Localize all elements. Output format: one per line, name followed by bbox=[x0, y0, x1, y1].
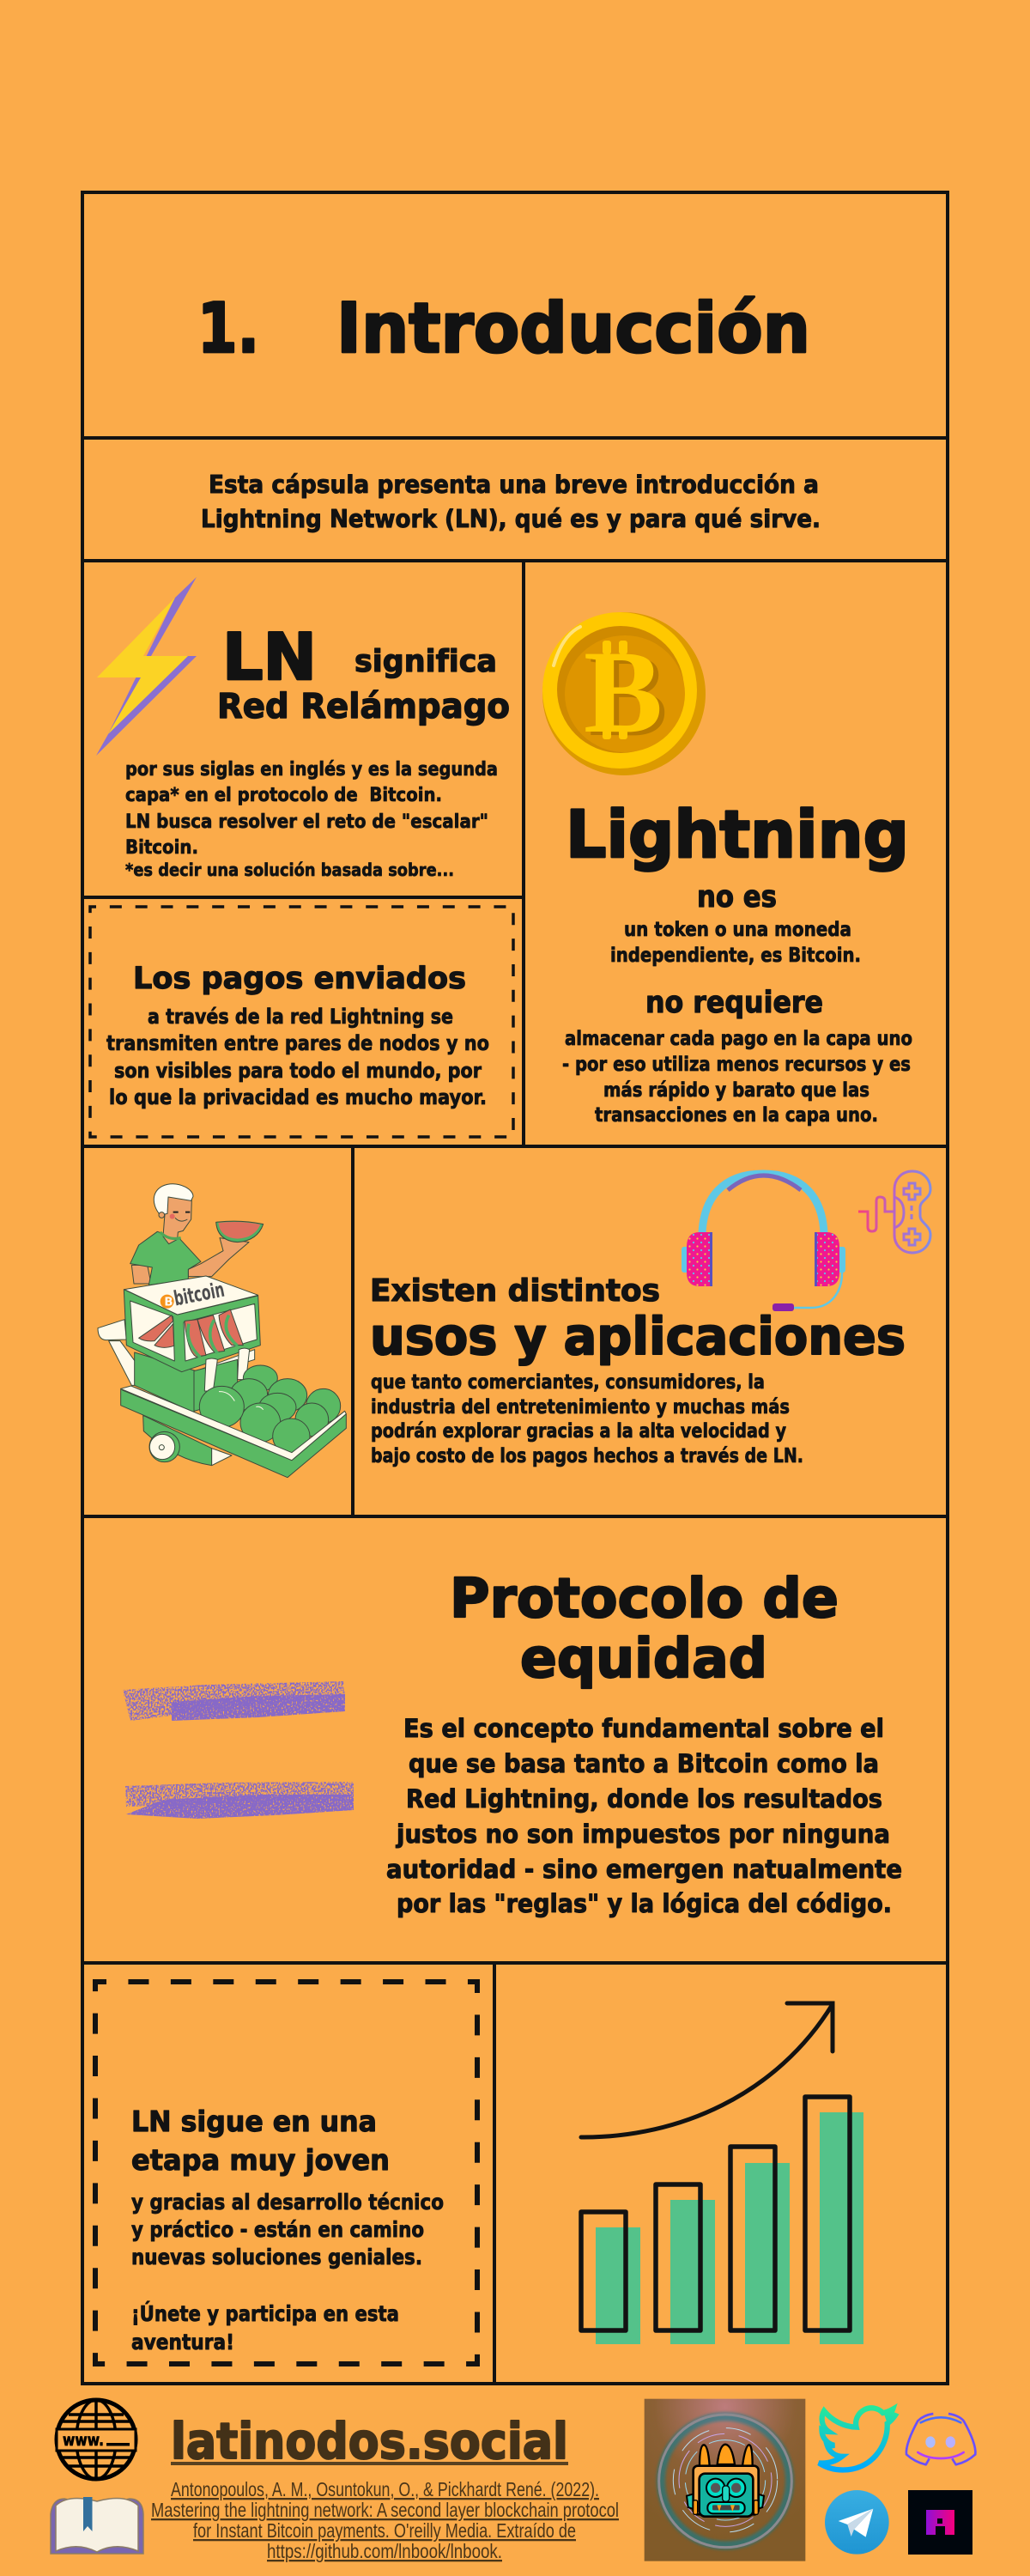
body text: LN busca resolver el reto de "escalar" bbox=[125, 811, 488, 833]
text: no requiere bbox=[562, 1026, 912, 1127]
citation: https://github.com/lnbook/lnbook. bbox=[267, 2540, 502, 2562]
icon: globe www bbox=[57, 2400, 136, 2479]
heading: LN sigue: etapa muy joven bbox=[131, 2143, 390, 2177]
text: no es bbox=[610, 917, 861, 967]
icon: discord bbox=[906, 2414, 975, 2464]
body text: industria del entretenimiento y muchas más bbox=[371, 1396, 790, 1419]
intro line 1: Esta cápsula presenta una breve introducción a bbox=[209, 471, 819, 499]
panel: Los pagos enviados bbox=[82, 897, 524, 1146]
text: no es: un token o una moneda bbox=[624, 917, 851, 941]
body text: *es decir una solución basada sobre... bbox=[125, 860, 454, 880]
text: no es: independiente, es Bitcoin. bbox=[610, 943, 861, 967]
logo: latinodos mask bbox=[645, 2399, 805, 2561]
body text: que se basa tanto a Bitcoin como la bbox=[409, 1749, 879, 1778]
arrow: growth curve bbox=[581, 2003, 833, 2137]
panel: watermelon cart illustration bbox=[82, 1146, 353, 1516]
heading: usos y aplicaciones: usos y aplicaciones bbox=[370, 1307, 906, 1367]
body text: ¡Únete y participa en esta bbox=[131, 2300, 399, 2326]
icon: lightning bolt bbox=[96, 577, 197, 756]
heading: Lightning: Lightning bbox=[566, 796, 909, 872]
body text: Bitcoin. bbox=[125, 836, 198, 859]
brush stroke 1 bbox=[123, 1681, 345, 1721]
heading: LN sigue: LN sigue en una bbox=[131, 2105, 377, 2138]
bar chart bbox=[581, 2097, 863, 2344]
body text: por las "reglas" y la lógica del código. bbox=[397, 1889, 892, 1918]
panel: LN significa bbox=[82, 561, 524, 897]
body text: capa* en el protocolo de Bitcoin. bbox=[125, 784, 442, 806]
heading: number: 1. bbox=[197, 289, 259, 368]
body text: son visibles para todo el mundo, por bbox=[114, 1059, 482, 1083]
body text bbox=[386, 1714, 902, 1918]
icon: app square bbox=[908, 2490, 972, 2555]
panel: LN sigue bbox=[82, 1963, 494, 2384]
body text: a través de la red Lightning se bbox=[148, 1005, 453, 1029]
icon: bitcoin coin bbox=[542, 612, 706, 775]
dashed frame bbox=[90, 907, 513, 1137]
body text bbox=[371, 1371, 803, 1467]
citation: for Instant Bitcoin payments. O'reilly Media. Extraído de bbox=[193, 2519, 576, 2542]
panel: usos y aplicaciones bbox=[353, 1146, 948, 1516]
citation: Mastering the lightning network: A second layer blockchain protocol bbox=[151, 2499, 619, 2521]
text: no requiere: - por eso utiliza menos recursos y es bbox=[562, 1052, 911, 1076]
illustration: vendor with bitcoin cart bbox=[98, 1184, 346, 1478]
icon: telegram bbox=[825, 2490, 889, 2555]
panel: title bbox=[82, 192, 948, 438]
icon: bitcoin coin: B bbox=[584, 626, 663, 757]
body text: Red Lightning, donde los resultados bbox=[406, 1784, 882, 1814]
citation: Antonopoulos, A. M., Osuntokun, O., & Pickhardt René. (2022). bbox=[171, 2478, 599, 2500]
illustration: vendor with bitcoin cart: B bbox=[164, 1297, 173, 1309]
citation bbox=[151, 2478, 619, 2562]
icon: headset bbox=[682, 1174, 845, 1311]
body text bbox=[106, 1005, 489, 1109]
icon: bitcoin coin: B bbox=[589, 629, 668, 761]
dashed frame bbox=[95, 1982, 477, 2364]
body text bbox=[131, 2190, 444, 2354]
body text: lo que la privacidad es mucho mayor. bbox=[109, 1085, 487, 1109]
heading: Introducción: Introducción bbox=[336, 289, 810, 368]
panel: Protocolo de equidad bbox=[82, 1516, 948, 1963]
panel: Lightning bbox=[524, 561, 948, 1146]
body text: y gracias al desarrollo técnico bbox=[131, 2190, 444, 2215]
subheading: no es: no es bbox=[697, 880, 777, 914]
body text: podrán explorar gracias a la alta velocidad y bbox=[371, 1420, 786, 1443]
heading: LN: LN bbox=[222, 619, 317, 695]
icon: twitter bbox=[819, 2408, 895, 2470]
body text: transmiten entre pares de nodos y no bbox=[106, 1031, 489, 1055]
heading: LN sigue bbox=[131, 2105, 390, 2177]
icon: gamepad with cable bbox=[858, 1171, 930, 1253]
icon: globe www: www. bbox=[63, 2431, 104, 2450]
body text: por sus siglas en inglés y es la segunda bbox=[125, 758, 498, 781]
heading: significa: significa bbox=[354, 644, 497, 679]
website link: latinodos.social bbox=[171, 2412, 568, 2470]
body text: autoridad - sino emergen natualmente bbox=[386, 1855, 902, 1884]
heading: equidad: equidad bbox=[520, 1627, 767, 1690]
panel: intro text bbox=[82, 438, 948, 561]
body text: que tanto comerciantes, consumidores, la bbox=[371, 1371, 765, 1394]
text: no requiere: más rápido y barato que las bbox=[603, 1078, 869, 1102]
heading: Los pagos enviados: Los pagos enviados bbox=[133, 962, 466, 996]
body text: y práctico - están en camino bbox=[131, 2217, 424, 2242]
heading: Protocolo de: Protocolo de bbox=[450, 1567, 839, 1630]
subheading: no requiere: no requiere bbox=[645, 986, 823, 1020]
body text: bajo costo de los pagos hechos a través de LN. bbox=[371, 1445, 803, 1467]
heading: Existen distintos: Existen distintos bbox=[370, 1273, 660, 1309]
illustration: vendor with bitcoin cart: bitcoin bbox=[172, 1278, 227, 1311]
body text bbox=[125, 758, 498, 880]
brush stroke 2 bbox=[125, 1782, 354, 1819]
text: no requiere: almacenar cada pago en la capa uno bbox=[565, 1026, 912, 1050]
body text: aventura! bbox=[131, 2330, 234, 2354]
text: no requiere: transacciones en la capa uno. bbox=[595, 1103, 878, 1127]
heading: Red Relámpago: Red Relámpago bbox=[217, 687, 510, 726]
body text: nuevas soluciones geniales. bbox=[131, 2245, 422, 2269]
body text: justos no son impuestos por ninguna bbox=[396, 1820, 890, 1849]
panel: growth chart bbox=[494, 1963, 948, 2384]
intro line 2: Lightning Network (LN), qué es y para qué sirve. bbox=[201, 505, 821, 533]
icon: open book bbox=[51, 2497, 143, 2554]
body text: Es el concepto fundamental sobre el bbox=[403, 1714, 884, 1743]
